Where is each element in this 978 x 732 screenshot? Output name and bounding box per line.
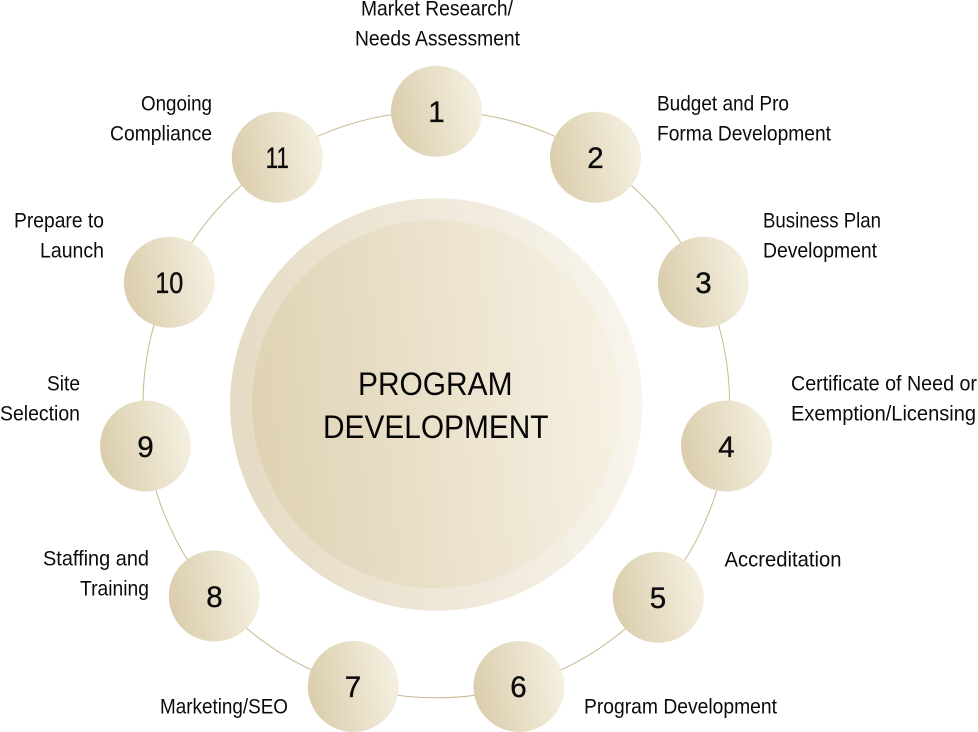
step 11 label: Ongoing bbox=[141, 92, 212, 116]
step 4 node bbox=[681, 400, 772, 492]
step 2 label bbox=[657, 92, 831, 146]
step 5 node bbox=[613, 552, 704, 643]
step 4 node: 4 bbox=[718, 431, 735, 464]
step 8 label bbox=[43, 548, 149, 600]
step 10 node bbox=[124, 237, 215, 328]
step 10 label: Prepare to bbox=[14, 210, 104, 232]
step 3 node bbox=[658, 237, 749, 328]
step 1 label: Needs Assessment bbox=[355, 28, 520, 50]
central title: DEVELOPMENT bbox=[323, 409, 548, 445]
step 9 label bbox=[0, 372, 80, 426]
step 1 node: 1 bbox=[428, 96, 445, 129]
step 5 label: Accreditation bbox=[724, 548, 842, 572]
step 6 node: 6 bbox=[510, 671, 527, 704]
step 9 node: 9 bbox=[137, 431, 154, 464]
step 1 node bbox=[391, 66, 482, 157]
step 11 label: Compliance bbox=[110, 122, 212, 146]
step 8 label: Staffing and bbox=[43, 548, 149, 570]
step 11 node: 11 bbox=[266, 142, 289, 175]
step 3 label bbox=[763, 210, 881, 262]
step 6 node bbox=[474, 641, 564, 732]
step 2 node: 2 bbox=[587, 142, 604, 175]
central title: PROGRAM bbox=[358, 366, 512, 402]
step 2 node bbox=[550, 112, 641, 203]
step 9 label: Site bbox=[47, 372, 80, 396]
step 5 node: 5 bbox=[650, 582, 666, 615]
step 8 label: Training bbox=[80, 578, 149, 600]
step 6 label: Program Development bbox=[584, 696, 777, 718]
step 3 label: Development bbox=[763, 240, 877, 262]
step 11 node bbox=[232, 112, 323, 203]
step 10 label: Launch bbox=[40, 240, 104, 262]
step 7 node: 7 bbox=[345, 671, 361, 704]
step 7 label: Marketing/SEO bbox=[160, 696, 288, 718]
step 4 label bbox=[791, 372, 977, 426]
step 11 label bbox=[110, 92, 212, 146]
central circle bbox=[230, 198, 643, 611]
step 3 label: Business Plan bbox=[763, 210, 881, 232]
step 8 node: 8 bbox=[206, 581, 223, 614]
step 2 label: Budget and Pro bbox=[657, 92, 789, 116]
step 10 node: 10 bbox=[155, 267, 183, 300]
step 1 label bbox=[355, 0, 520, 50]
step 3 node: 3 bbox=[695, 267, 712, 300]
step 2 label: Forma Development bbox=[657, 122, 831, 146]
step 8 node bbox=[169, 550, 260, 642]
step 9 label: Selection bbox=[0, 402, 80, 426]
step 10 label bbox=[14, 210, 104, 262]
central title bbox=[323, 366, 548, 445]
step 9 node bbox=[100, 400, 191, 492]
step 7 node bbox=[308, 641, 399, 732]
connecting ring bbox=[143, 111, 730, 698]
